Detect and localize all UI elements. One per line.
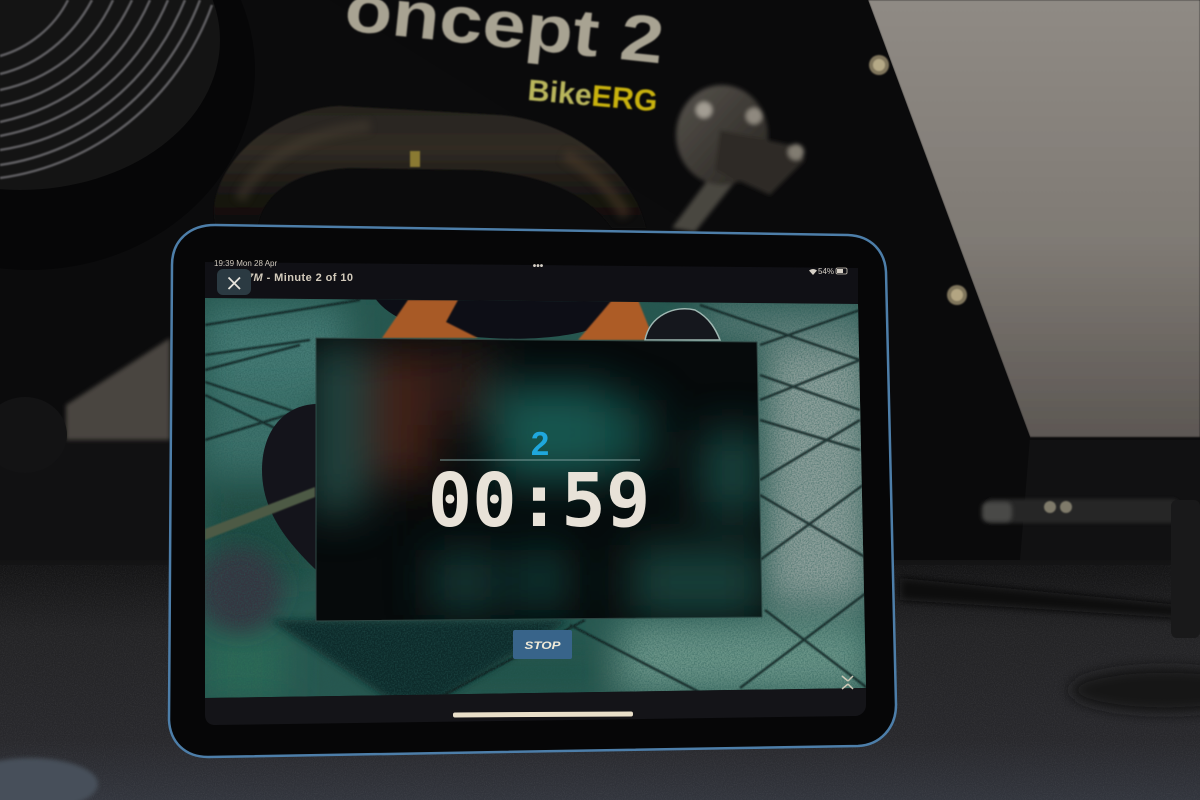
round foot, left xyxy=(0,397,67,473)
status time: 19:39 Mon 28 Apr xyxy=(214,259,277,268)
floor texture xyxy=(0,565,1200,800)
barbell shaft xyxy=(205,487,315,540)
machine frame xyxy=(330,0,1030,560)
weight plate, left xyxy=(262,404,316,570)
weight plate, right xyxy=(645,309,720,340)
right arm xyxy=(578,300,654,340)
screen photo xyxy=(198,295,870,705)
beige wall panel, right xyxy=(868,0,1200,437)
status: wifi and battery: 54% xyxy=(818,267,834,276)
dark tile diamond xyxy=(270,620,570,700)
minute number: 2 xyxy=(531,425,549,462)
fullscreen icon xyxy=(842,676,853,689)
close button xyxy=(217,269,251,295)
flywheel, top left xyxy=(0,0,255,270)
logo: Concept 2 BikeErg: BikeERG xyxy=(526,74,659,118)
left arm xyxy=(382,300,478,338)
athlete silhouette xyxy=(376,300,614,339)
tile colour patches xyxy=(205,305,870,700)
stop button: STOP xyxy=(524,640,561,652)
status: wifi and battery xyxy=(809,267,847,276)
floor shadow strip xyxy=(900,578,1180,618)
multitask dots: ••• xyxy=(533,261,544,272)
home indicator xyxy=(453,712,633,717)
floor xyxy=(0,560,1200,800)
workout title: 7M - Minute 2 of 10 xyxy=(247,272,353,284)
timer panel xyxy=(310,338,765,621)
countdown: 00:59 xyxy=(428,458,650,544)
divider xyxy=(440,460,640,461)
floor shadow, right xyxy=(1070,668,1200,712)
beige wall patch, left xyxy=(66,338,170,440)
purple shadow, left xyxy=(198,548,282,632)
blurred object, bottom left xyxy=(0,758,98,800)
metal bracket xyxy=(672,85,805,232)
dumbbell bar, right xyxy=(982,499,1200,638)
logo: Concept 2 BikeErg xyxy=(342,0,668,118)
stop button xyxy=(513,630,572,659)
tile speckle xyxy=(200,295,870,705)
floor tiles xyxy=(200,295,870,705)
kettlebell handle xyxy=(214,106,646,228)
tile lines xyxy=(205,300,870,697)
tablet body xyxy=(169,225,896,757)
tablet top bar xyxy=(205,262,858,304)
bottom bar xyxy=(205,688,866,725)
tablet xyxy=(169,225,896,757)
screws xyxy=(869,55,967,305)
